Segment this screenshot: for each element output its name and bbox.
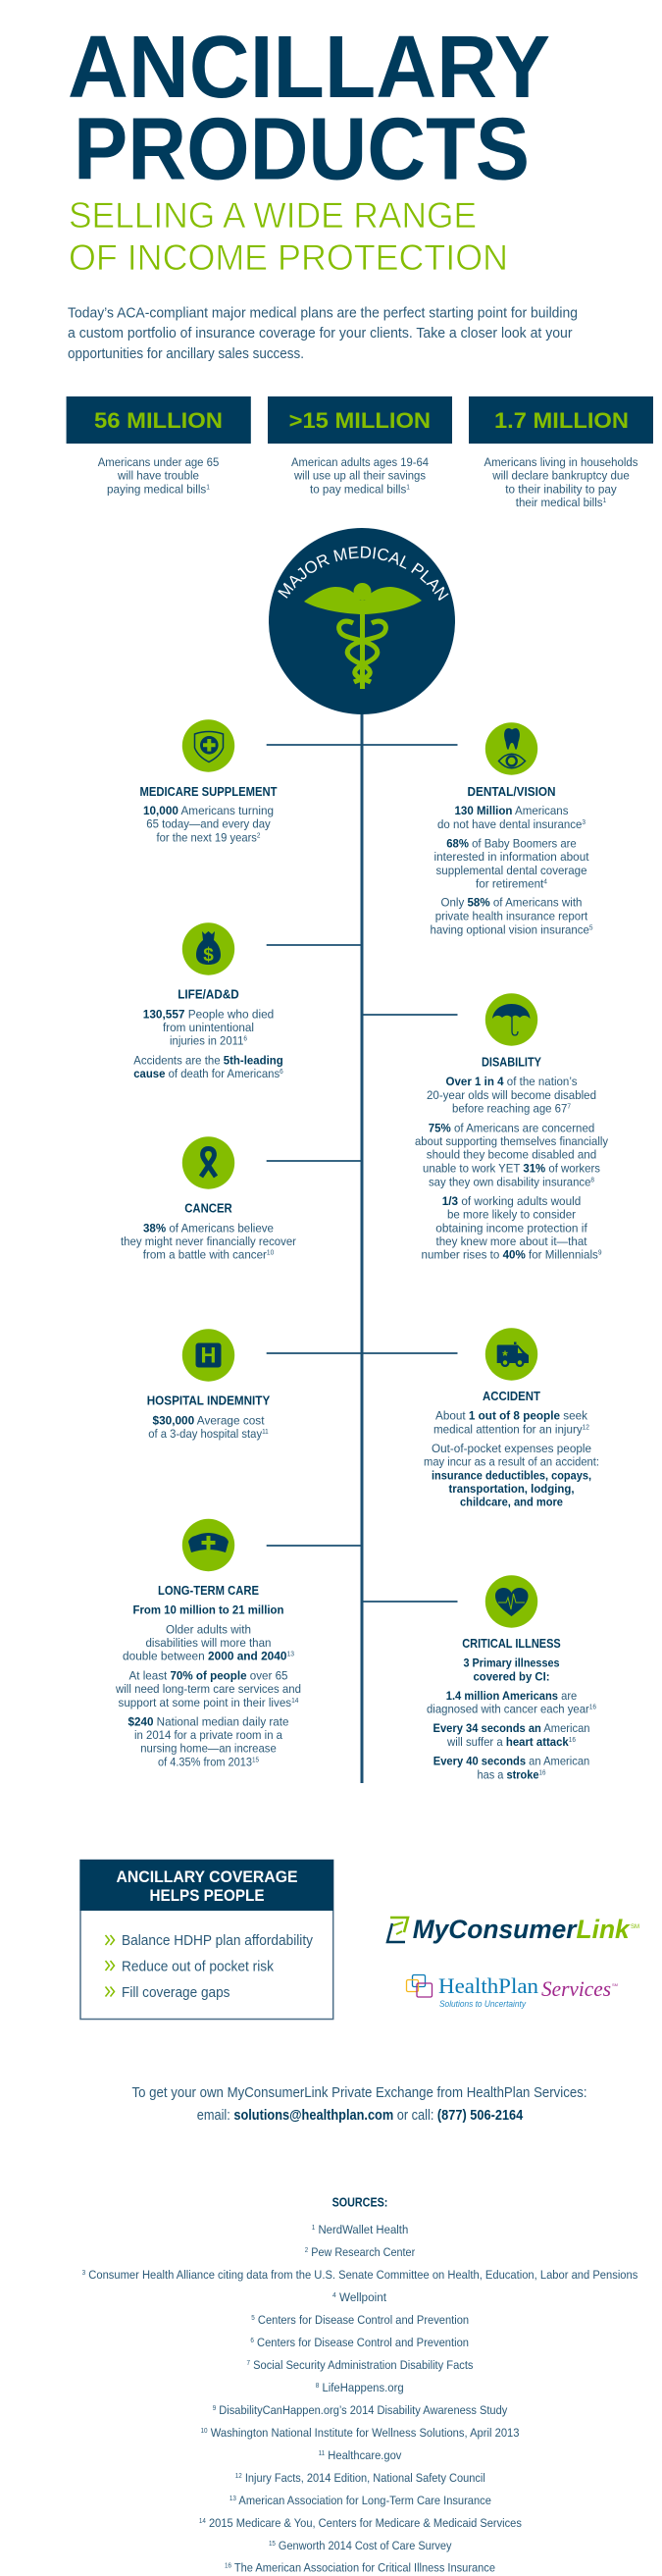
text: 16 bbox=[589, 1705, 596, 1711]
text: do not have dental insurance bbox=[437, 817, 592, 831]
sources list: DisabilityCanHappen.org’s 2014 Disability Awareness Study bbox=[216, 2403, 508, 2417]
sources list: LifeHappens.org bbox=[319, 2381, 404, 2394]
logo: HealthPlan Services: HealthPlan bbox=[438, 1973, 538, 1998]
title: ANCILLARY bbox=[68, 19, 550, 117]
text: be more likely to consider bbox=[447, 1208, 576, 1222]
text: double between 2000 and 2040 bbox=[123, 1650, 289, 1663]
sources list: 6 bbox=[250, 2338, 254, 2344]
text: 8 bbox=[590, 1177, 594, 1183]
heading: HOSPITAL INDEMNITY bbox=[147, 1393, 271, 1407]
sources list: American Association for Long-Term Care Insurance bbox=[236, 2494, 491, 2507]
text: Older adults with bbox=[166, 1622, 251, 1636]
sources list: Genworth 2014 Cost of Care Survey bbox=[276, 2539, 452, 2552]
text: 7 bbox=[567, 1104, 571, 1111]
text: 3 Primary illnesses bbox=[463, 1656, 560, 1670]
text: 68% of Baby Boomers are bbox=[446, 836, 577, 850]
sources list: 5 bbox=[251, 2315, 255, 2322]
stat: 1.7 million: their medical bills bbox=[516, 496, 608, 509]
text bbox=[115, 1603, 301, 1768]
text bbox=[148, 1413, 269, 1441]
panel: cancer bbox=[121, 1136, 296, 1262]
text: 12 bbox=[583, 1424, 589, 1431]
text: 38% of Americans believe bbox=[143, 1221, 274, 1235]
text: 13 bbox=[286, 1652, 294, 1658]
icon: ambulance: * bbox=[502, 1347, 508, 1363]
text: support at some point in their lives bbox=[118, 1696, 301, 1709]
sources list: 14 bbox=[199, 2518, 206, 2525]
text: $240 National median daily rate bbox=[127, 1714, 289, 1728]
sources list: 9 bbox=[213, 2405, 216, 2412]
major medical plan badge bbox=[269, 528, 455, 714]
text: supplemental dental coverage bbox=[435, 864, 587, 877]
sources list: NerdWallet Health bbox=[315, 2223, 408, 2236]
text: 130 Million Americans bbox=[455, 804, 569, 817]
sources list: Healthcare.gov bbox=[325, 2448, 402, 2462]
text: cause of death for Americans bbox=[133, 1067, 289, 1080]
text: Over 1 in 4 of the nation’s bbox=[445, 1075, 577, 1088]
icon: money bag: $ bbox=[203, 945, 214, 966]
stat: 56 million: paying medical bills bbox=[107, 482, 212, 496]
text: will need long-term care services and bbox=[115, 1682, 301, 1696]
text: 11 bbox=[262, 1429, 269, 1436]
text: 75% of Americans are concerned bbox=[429, 1121, 594, 1134]
text: in 2014 for a private room in a bbox=[134, 1728, 282, 1742]
text: transportation, lodging, bbox=[449, 1482, 575, 1496]
text: nursing home—an increase bbox=[140, 1742, 277, 1756]
heading: CANCER bbox=[184, 1201, 232, 1216]
intro paragraph bbox=[68, 304, 578, 362]
text: unable to work YET 31% of workers bbox=[423, 1161, 600, 1175]
text: 16 bbox=[569, 1737, 576, 1744]
call to action: To get your own MyConsumerLink Private Exchange from HealthPlan Services: bbox=[131, 2084, 586, 2101]
heading: LIFE/AD&D bbox=[178, 987, 239, 1002]
sources list: 11 bbox=[319, 2450, 325, 2457]
text: from a battle with cancer bbox=[143, 1248, 275, 1262]
intro paragraph: Today’s ACA-compliant major medical plans are the perfect starting point for building bbox=[68, 304, 578, 322]
sources list: 12 bbox=[235, 2473, 242, 2480]
text: 1/3 of working adults would bbox=[442, 1194, 581, 1208]
stat: 56 million: 56 MILLION bbox=[94, 408, 223, 433]
sources list: 10 bbox=[200, 2428, 208, 2435]
text: 20-year olds will become disabled bbox=[427, 1088, 596, 1102]
logo: HealthPlan Services bbox=[406, 1973, 618, 2009]
logo: MyConsumerLink: MyConsumerLink bbox=[413, 1915, 632, 1944]
icon: ambulance bbox=[497, 1342, 529, 1366]
stat: 56 million: will have trouble bbox=[117, 469, 199, 483]
text: Every 40 seconds an American bbox=[433, 1754, 589, 1767]
icon: nurse cap bbox=[188, 1533, 229, 1552]
text: 65 today—and every day bbox=[146, 817, 272, 831]
text: injuries in 2011 bbox=[170, 1034, 250, 1048]
panel: ancillary coverage helps people bbox=[80, 1860, 333, 2020]
text: 6 bbox=[280, 1069, 283, 1076]
text bbox=[133, 1007, 283, 1080]
text: 4 bbox=[543, 879, 547, 886]
text: may incur as a result of an accident: bbox=[424, 1455, 599, 1469]
text: Out-of-pocket expenses people bbox=[432, 1442, 591, 1455]
heading: ACCIDENT bbox=[483, 1389, 540, 1403]
text bbox=[430, 804, 593, 936]
text bbox=[121, 1221, 296, 1262]
stat: 56 million: Americans under age 65 bbox=[98, 455, 219, 469]
text: insurance deductibles, copays, bbox=[432, 1468, 591, 1482]
stat: 56 million: 1 bbox=[206, 484, 210, 491]
text: 5 bbox=[589, 924, 593, 931]
text: 14 bbox=[291, 1698, 299, 1705]
text: they might never financially recover bbox=[121, 1235, 296, 1248]
intro paragraph: opportunities for ancillary sales success. bbox=[68, 345, 304, 362]
badge label: MAJOR MEDICAL PLAN bbox=[278, 546, 449, 601]
text: From 10 million to 21 million bbox=[133, 1603, 284, 1617]
text: having optional vision insurance bbox=[430, 922, 601, 936]
text: About 1 out of 8 people seek bbox=[435, 1409, 588, 1423]
icon: umbrella bbox=[492, 1004, 530, 1035]
text: 2 bbox=[257, 832, 261, 839]
stat: 1.7 million: to their inability to pay bbox=[505, 482, 618, 496]
sources list: Centers for Disease Control and Prevention bbox=[254, 2336, 469, 2349]
text: obtaining income protection if bbox=[435, 1221, 587, 1235]
logo: MyConsumerLink: SM bbox=[631, 1924, 639, 1930]
text: Only 58% of Americans with bbox=[441, 896, 583, 910]
sources list: 2 bbox=[305, 2247, 308, 2254]
text: will suffer a heart attack bbox=[447, 1735, 574, 1749]
text: before reaching age 67 bbox=[452, 1102, 576, 1116]
subtitle bbox=[69, 195, 508, 278]
text: Accidents are the 5th-leading bbox=[133, 1053, 283, 1067]
icon: money bag bbox=[196, 931, 221, 966]
text: about supporting themselves financially bbox=[415, 1134, 609, 1148]
bullet list: Fill coverage gaps bbox=[122, 1984, 229, 2001]
text bbox=[415, 1075, 609, 1262]
text: number rises to 40% for Millennials bbox=[422, 1248, 602, 1262]
panel: hospital indemnity bbox=[147, 1329, 271, 1441]
heading: DENTAL/VISION bbox=[467, 784, 555, 799]
text bbox=[427, 1656, 596, 1781]
stat: 56 million bbox=[67, 396, 251, 496]
text: 6 bbox=[243, 1036, 247, 1043]
text: medical attention for an injury bbox=[433, 1422, 591, 1436]
call to action: email: solutions@healthplan.com or call: (877) 506-2164 bbox=[197, 2107, 524, 2124]
text: 1.4 million Americans are bbox=[446, 1689, 577, 1703]
text: of a 3-day hospital stay bbox=[148, 1427, 273, 1441]
text: private health insurance report bbox=[435, 910, 588, 923]
text: Every 34 seconds an American bbox=[433, 1721, 590, 1735]
text bbox=[424, 1409, 599, 1509]
text: 15 bbox=[252, 1757, 259, 1763]
heading: LONG-TERM CARE bbox=[158, 1583, 259, 1598]
stat: 1.7 million bbox=[469, 396, 653, 509]
text: should they become disabled and bbox=[427, 1148, 596, 1162]
panel: disability bbox=[415, 993, 609, 1262]
sources list: Social Security Administration Disability Facts bbox=[250, 2358, 473, 2372]
heading: MEDICARE SUPPLEMENT bbox=[139, 784, 278, 799]
bullet list bbox=[106, 1932, 313, 2001]
subtitle: OF INCOME PROTECTION bbox=[69, 237, 508, 278]
icon: ribbon bbox=[201, 1148, 216, 1177]
title bbox=[68, 19, 550, 198]
text: from unintentional bbox=[163, 1021, 254, 1034]
text: covered by CI: bbox=[473, 1669, 549, 1683]
stat: more than 15 million: will use up all their savings bbox=[293, 469, 426, 483]
icon: shield bbox=[194, 732, 224, 762]
text: 130,557 People who died bbox=[143, 1007, 274, 1021]
sources list: Pew Research Center bbox=[308, 2245, 415, 2259]
sources list: Wellpoint bbox=[336, 2290, 387, 2304]
bullet list: Balance HDHP plan affordability bbox=[122, 1932, 313, 1949]
icon: tooth and eye bbox=[498, 728, 526, 768]
logo: HealthPlan Services: Services bbox=[541, 1976, 611, 2001]
panel heading: HELPS PEOPLE bbox=[149, 1886, 265, 1905]
sources list: 15 bbox=[269, 2541, 276, 2548]
subtitle: SELLING A WIDE RANGE bbox=[69, 195, 477, 236]
sources list bbox=[82, 2223, 637, 2575]
text bbox=[143, 804, 274, 844]
text: 10,000 Americans turning bbox=[143, 804, 274, 817]
sources list: The American Association for Critical Illness Insurance bbox=[231, 2561, 495, 2575]
panel: medicare supplement bbox=[139, 719, 278, 844]
sources list: Centers for Disease Control and Prevention bbox=[255, 2313, 469, 2327]
bullet list: Reduce out of pocket risk bbox=[122, 1958, 274, 1974]
text: they knew more about it—that bbox=[435, 1235, 587, 1248]
heading: CRITICAL ILLNESS bbox=[462, 1636, 561, 1651]
stat: 1.7 million: Americans living in households bbox=[484, 455, 637, 469]
stat: more than 15 million: American adults ages 19-64 bbox=[291, 455, 429, 469]
sources list: 8 bbox=[316, 2383, 319, 2390]
icon: heart with pulse bbox=[495, 1588, 528, 1616]
icon: hospital sign: H bbox=[201, 1342, 216, 1368]
sources list: 2015 Medicare & You, Centers for Medicare & Medicaid Services bbox=[206, 2516, 522, 2530]
sources bbox=[82, 2194, 637, 2575]
stat: more than 15 million bbox=[268, 396, 452, 496]
panel: life/AD&D bbox=[133, 922, 283, 1080]
text: disabilities will more than bbox=[145, 1636, 272, 1650]
panel: dental/vision bbox=[430, 722, 593, 936]
logo: HealthPlan Services: SM bbox=[612, 1982, 618, 1987]
stat: more than 15 million: 1 bbox=[406, 484, 410, 491]
text: interested in information about bbox=[433, 850, 589, 864]
text: 16 bbox=[539, 1769, 546, 1776]
sources list: 13 bbox=[229, 2496, 236, 2502]
text: has a stroke bbox=[477, 1767, 542, 1781]
text: for the next 19 years bbox=[157, 830, 267, 844]
panel heading bbox=[116, 1867, 298, 1905]
text: childcare, and more bbox=[460, 1496, 563, 1509]
panel: critical illness bbox=[427, 1575, 596, 1781]
stat: 1.7 million: 1.7 MILLION bbox=[494, 408, 629, 433]
text: say they own disability insurance bbox=[429, 1175, 604, 1188]
text: 3 bbox=[582, 819, 586, 826]
sources list: 4 bbox=[332, 2292, 336, 2299]
call to action bbox=[131, 2084, 586, 2124]
text: of 4.35% from 2013 bbox=[158, 1755, 263, 1768]
sources list: 16 bbox=[225, 2563, 231, 2569]
sources list: Injury Facts, 2014 Edition, National Safety Council bbox=[242, 2471, 485, 2485]
stat: more than 15 million: >15 MILLION bbox=[289, 408, 431, 433]
panel: long-term care bbox=[115, 1519, 301, 1768]
sources list: 7 bbox=[247, 2360, 250, 2367]
timeline connector lines bbox=[267, 711, 457, 1783]
panel: accident bbox=[424, 1328, 599, 1509]
text: diagnosed with cancer each year bbox=[427, 1703, 603, 1716]
panel heading: ANCILLARY COVERAGE bbox=[116, 1867, 298, 1886]
stat: more than 15 million: to pay medical bills bbox=[310, 482, 412, 496]
title: PRODUCTS bbox=[74, 100, 530, 198]
logo: HealthPlan Services: Solutions to Uncertainty bbox=[439, 1999, 526, 2009]
text: for retirement bbox=[476, 877, 547, 891]
text: $30,000 Average cost bbox=[153, 1413, 265, 1427]
sources list: 3 bbox=[82, 2270, 85, 2277]
heading: DISABILITY bbox=[482, 1055, 541, 1070]
sources list: 1 bbox=[312, 2225, 315, 2232]
intro paragraph: a custom portfolio of insurance coverage for your clients. Take a closer look at your bbox=[68, 325, 573, 342]
icon: caduceus bbox=[304, 583, 422, 689]
stat: 1.7 million: will declare bankruptcy due bbox=[491, 469, 630, 483]
sources heading: SOURCES: bbox=[332, 2194, 387, 2209]
sources list: Washington National Institute for Wellness Solutions, April 2013 bbox=[208, 2426, 520, 2440]
text: At least 70% of people over 65 bbox=[129, 1668, 288, 1682]
text: 9 bbox=[598, 1250, 602, 1257]
text: 10 bbox=[267, 1250, 274, 1257]
stat: 1.7 million: 1 bbox=[603, 498, 606, 504]
